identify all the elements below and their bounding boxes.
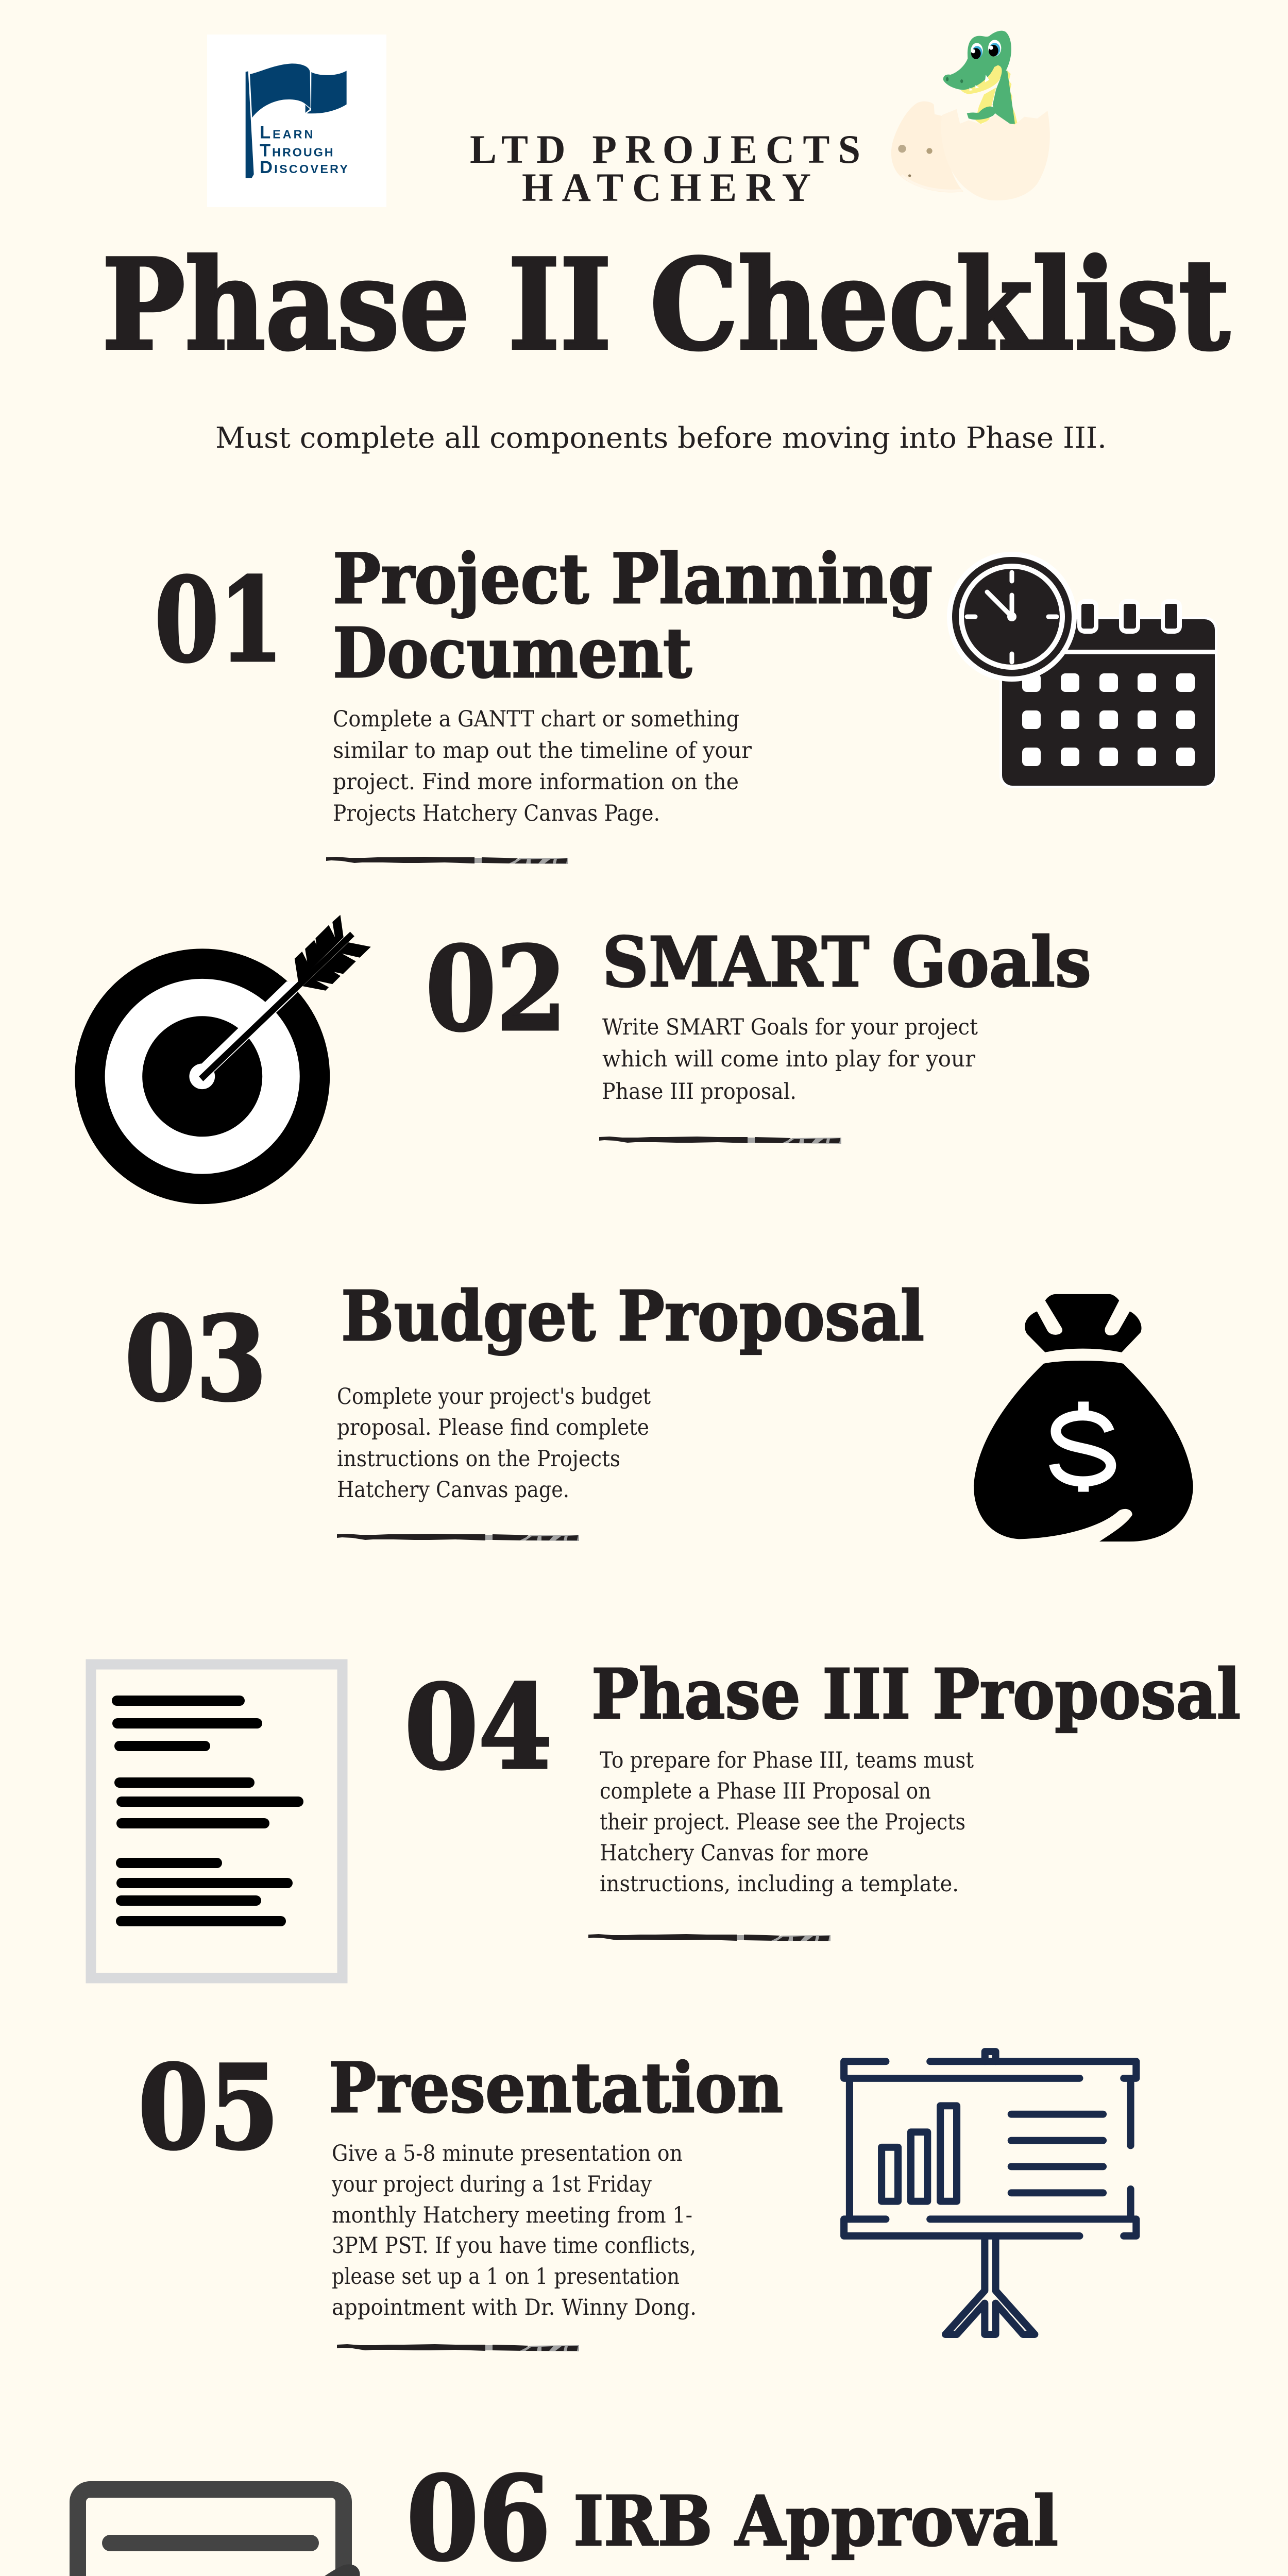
body text [337,1384,651,1503]
subtitle: Must complete all components before moving into Phase III. [215,421,1107,455]
body text [333,706,752,826]
body text: Hatchery Canvas page. [337,1477,569,1503]
panel: 05 presentation [138,2040,1136,2351]
body text [600,1748,974,1897]
body text: appointment with Dr. Winny Dong. [332,2295,697,2320]
number 01: 01 [155,552,283,688]
body text: instructions, including a template. [600,1871,959,1897]
hatchery wordmark: LTD PROJECTS [470,127,860,172]
body text: your project during a 1st Friday [331,2172,652,2197]
icon: target with arrow [75,915,371,1204]
body text: Hatchery Canvas for more [600,1840,869,1866]
icon: presentation board [844,2052,1136,2334]
body text: 3PM PST. If you have time conflicts, [332,2233,696,2259]
hatchery wordmark: HATCHERY [522,165,811,210]
heading: Phase III Proposal [591,1654,1241,1735]
heading: Presentation [329,2048,783,2128]
body text: project. Find more information on the [333,769,739,795]
body text: To prepare for Phase III, teams must [600,1748,974,1773]
panel: 02 smart goals [75,915,1091,1204]
panel: 04 phase iii proposal [91,1654,1241,1978]
logo: Learn Through Discovery: DISCOVERY [260,158,348,177]
body text: Give a 5-8 minute presentation on [332,2141,683,2166]
body text: their project. Please see the Projects [600,1809,965,1835]
body text: Complete a GANTT chart or something [333,706,739,732]
heading: SMART Goals [602,922,1091,1003]
body text: Write SMART Goals for your project [602,1014,978,1040]
body text [602,1014,978,1105]
body text: instructions on the Projects [337,1446,620,1472]
panel: 03 budget proposal [125,1276,1193,1541]
number 05: 05 [138,2040,279,2175]
body text: Projects Hatchery Canvas Page. [333,801,660,826]
number 03: 03 [125,1291,267,1427]
heading: Document [333,613,692,693]
panel: 06 irb approval [78,2451,1058,2576]
header [207,31,1050,210]
icon: crocodile hatching from egg [891,31,1050,200]
logo: Learn Through Discovery [207,35,386,207]
hatchery wordmark [470,127,860,210]
body text: Complete your project's budget [337,1384,651,1410]
body text: which will come into play for your [602,1046,975,1072]
heading: IRB Approval [573,2481,1058,2562]
panel: 01 project planning document [155,539,1217,864]
body text [331,2141,697,2320]
heading: Budget Proposal [341,1276,924,1357]
body text: complete a Phase III Proposal on [600,1778,931,1804]
icon: money bag [974,1294,1193,1541]
icon: checklist with check mark [78,2489,354,2576]
logo: Learn Through Discovery: LEARN [260,123,313,142]
icon: clock and calendar [947,552,1217,788]
body text: please set up a 1 on 1 presentation [332,2264,680,2290]
body text: Phase III proposal. [602,1079,796,1105]
heading: Project Planning [333,539,933,619]
body text: monthly Hatchery meeting from 1- [332,2202,692,2228]
heading [333,539,933,693]
body text: similar to map out the timeline of your [333,738,752,764]
number 02: 02 [426,921,567,1057]
icon: document [91,1664,342,1978]
number 04: 04 [404,1659,552,1795]
body text: proposal. Please find complete [337,1415,649,1440]
logo: Learn Through Discovery: THROUGH [260,141,333,160]
